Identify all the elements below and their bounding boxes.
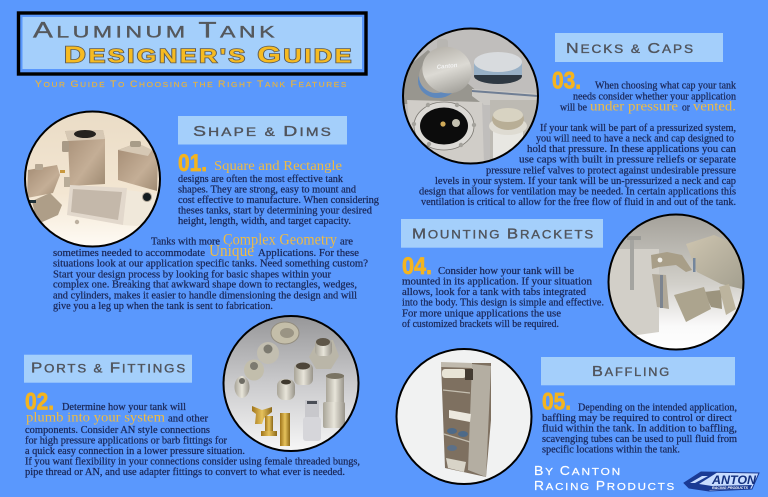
section 03 text: ventilation is critical to allow for the free flow of fluid in and out of the tank. (421, 196, 736, 208)
section 01 text: complex geometry (53, 232, 368, 312)
section 04 text: into the body. This design is simple and effective. (402, 297, 604, 309)
section 01 text: height, length, width, and target capacity. (178, 215, 351, 227)
heading: Ports & Fittings: PORTS & FITTINGS (31, 361, 187, 377)
photo: fittings (222, 315, 360, 453)
heading: Baffling (541, 357, 735, 385)
logo: Canton Racing Products: RACING PRODUCTS (712, 486, 749, 490)
section 03 text (419, 68, 737, 208)
section 04 text: For more unique applications the use (402, 307, 561, 319)
section 01 text: complex geometry: and cylinders, makes it easier to handle dimensioning the design and will (53, 289, 357, 301)
section 05 text: specific locations within the tank. (542, 444, 680, 456)
logo: Canton Racing Products: ANTON (711, 473, 756, 487)
section 04 text: Consider how your tank will be (438, 265, 574, 277)
section 03 text: pressure relief valves to protect against undesirable pressure (486, 164, 736, 176)
section 05 text: scavenging tubes can be used to pull fluid from (542, 433, 738, 445)
section 04 text: mounted in its application. If your situation (402, 276, 593, 288)
section 05 text: Depending on the intended application, (578, 401, 737, 413)
heading: Shape & Dims: S HAPE & D IMS (193, 124, 333, 140)
section 01 text: complex geometry: give you a leg up when the tank is sent to fabrication. (53, 300, 273, 312)
section 02 text: a quick easy connection in a lower pressure situation. (25, 445, 245, 457)
section 01 text: complex geometry: Complex Geometry (223, 232, 337, 248)
title panel (18, 13, 366, 74)
section 02 text: and other (168, 413, 208, 425)
section 03 text: When choosing what cap your tank (595, 79, 737, 91)
section 03 text: needs consider whether your application (573, 90, 737, 102)
heading: Ports & Fittings (24, 355, 192, 383)
section 01 text: complex geometry: Applications. For these (258, 247, 359, 259)
highlight: under pressure: under pressure (590, 100, 678, 115)
section 05 text: baffling may be required to control or direct (542, 412, 732, 424)
section 03 text: If your tank will be part of a pressurized system, (540, 122, 736, 134)
photo: baffling (395, 348, 533, 486)
section 03 text: use caps with built in pressure reliefs or separate (519, 154, 736, 166)
number 03: 03. (552, 68, 581, 94)
logo: Canton Racing Products (684, 472, 759, 491)
photo: mounting brackets (607, 214, 747, 354)
highlight: plumb into your system: plumb into your system (26, 411, 165, 426)
section 02 text: If you want flexibility in your connections consider using female threaded bungs, (25, 456, 360, 468)
credit: By Canton Racing Products: RACING PRODUCTS (534, 479, 676, 493)
section 03 text: or (682, 102, 690, 114)
photo: necks and caps: Canton (437, 63, 458, 71)
heading: Mounting Brackets (401, 219, 603, 248)
section 01 text: complex geometry: Tanks with more (151, 236, 220, 248)
number 05: 05. (542, 388, 571, 416)
section 02 text (25, 388, 360, 478)
heading: Baffling: BAFFLING (592, 364, 671, 380)
title line: Designer's Guide: D ESIGNER'S G UIDE (64, 42, 354, 68)
number 02: 02. (25, 388, 54, 416)
section 03 text: hold that pressure. In these applications you can (527, 143, 737, 155)
highlight: Square and Rectangle: Square and Rectangle (214, 159, 342, 174)
section 04 text (402, 253, 604, 330)
section 02 text: components. Consider AN style connections (25, 424, 210, 436)
highlight: vented: vented. (693, 100, 736, 115)
number 04: 04. (402, 253, 432, 280)
section 01 text: designs are often the most effective tank (178, 173, 344, 185)
section 03 text: design that allows for ventilation may be needed. In certain applications this (419, 186, 736, 198)
heading: Shape & Dims (178, 116, 347, 144)
section 01 text: shapes. They are strong, easy to mount and (178, 184, 357, 196)
section 03 text: you will need to have a neck and cap designed to (536, 132, 734, 144)
number 01: 01. (178, 150, 207, 177)
section 01 text: complex geometry: situations look at our application specific tanks. Need something custom? (53, 258, 368, 270)
section 02 text: Determine how your tank will (62, 401, 186, 413)
heading: Necks & Caps: NECKS & CAPS (566, 41, 695, 57)
subtitle: YOUR GUIDE TO CHOOSING THE RIGHT TANK FEATURES (35, 79, 348, 89)
section 05 text (542, 388, 738, 456)
heading: Mounting Brackets: MOUNTING BRACKETS (412, 226, 595, 242)
section 01 text: complex geometry: are (340, 236, 353, 248)
section 04 text: of customized brackets will be required. (402, 318, 559, 330)
section 01 text: complex geometry: Start your design process by looking for basic shapes within your (53, 268, 331, 280)
section 01 text: cost effective to manufacture. When considering (178, 194, 380, 206)
section 01 text (178, 150, 380, 227)
section 02 text: for high pressure applications or barb fittings for (25, 434, 227, 446)
credit: By Canton Racing Products: BY CANTON (534, 464, 622, 478)
title line: Aluminum Tank: A LUMINUM T ANK (33, 17, 278, 42)
section 01 text: complex geometry: Unique (209, 241, 254, 260)
section 01 text: complex geometry: complex one. Breaking that awkward shape down to rectangles, wedges, (53, 279, 357, 291)
section 03 text: levels in your system. If your tank will be un-pressurized a neck and cap (435, 175, 736, 187)
section 03 text: will be (560, 102, 587, 114)
section 05 text: fluid within the tank. In addition to baffling, (542, 422, 737, 434)
credit: By Canton Racing Products (534, 464, 676, 493)
section 04 text: allows, look for a tank with tabs integrated (402, 286, 587, 298)
photo: tank shapes (24, 110, 162, 248)
section 01 text: complex geometry: sometimes needed to accommodate (53, 247, 205, 259)
section 01 text: theses tanks, start by determining your desired (178, 204, 373, 216)
heading: Necks & Caps (555, 33, 723, 62)
section 02 text: pipe thread or AN, and use adapter fittings to convert to what ever is needed. (25, 466, 345, 478)
photo: necks and caps (402, 27, 540, 166)
